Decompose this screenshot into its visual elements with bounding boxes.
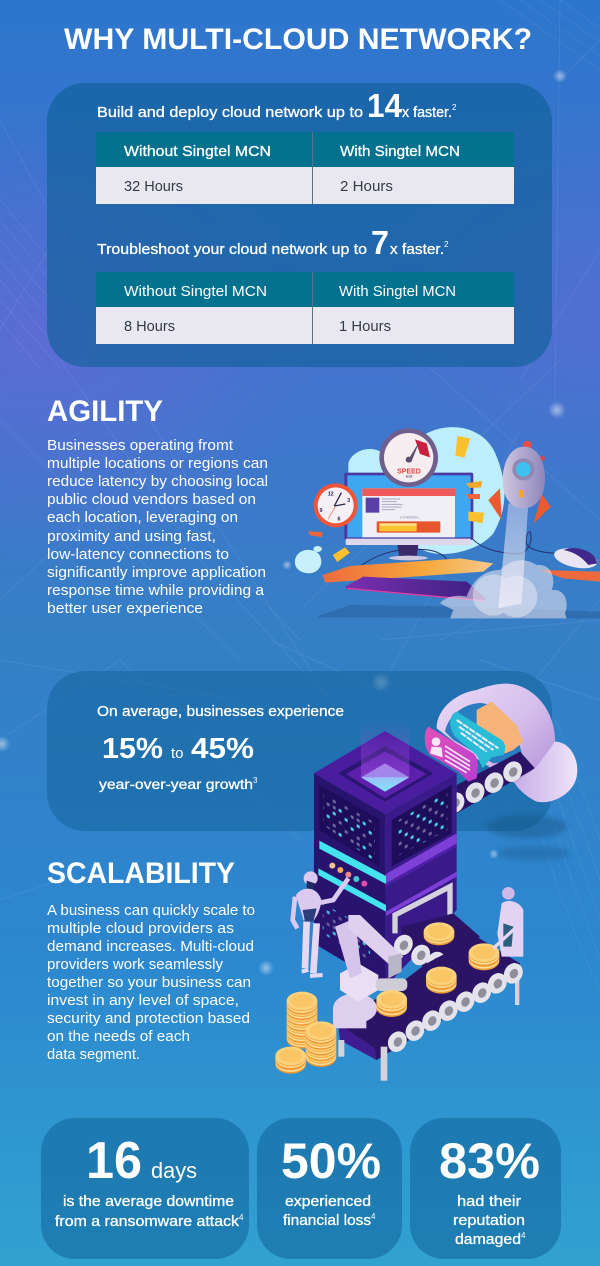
- table: build and deploy hours: [96, 132, 514, 204]
- heading: build and deploy: 14: [367, 87, 403, 124]
- icon: rocket: [488, 441, 551, 608]
- icon: right robot: [493, 887, 523, 957]
- icon: speed gauge: test: [406, 475, 413, 479]
- heading: build and deploy: [97, 87, 457, 124]
- icon: mouse: [552, 545, 599, 572]
- title: WHY MULTI-CLOUD NETWORK?: [64, 23, 532, 56]
- panel: financial loss statistic: experienced: [285, 1194, 371, 1210]
- heading: build and deploy: x faster.: [402, 104, 452, 121]
- icon: monitor: LOADING...: [400, 515, 422, 520]
- text block: scalability description: A business can quickly scale to: [47, 903, 255, 919]
- icon: left robot: [293, 871, 348, 976]
- icon: clock: 6: [338, 517, 341, 523]
- panel: downtime statistic: [41, 1118, 249, 1259]
- panel: growth statistic: 45%: [191, 733, 254, 765]
- table: build and deploy hours: With Singtel MCN: [340, 143, 460, 160]
- icon: robot arm: [333, 915, 407, 1028]
- icon: chat cards: [425, 712, 505, 782]
- heading: build and deploy: 2: [452, 103, 457, 112]
- text block: agility description: [47, 438, 268, 617]
- icon: back conveyor: [390, 913, 480, 976]
- table: troubleshoot hours: 8 Hours: [124, 318, 175, 335]
- icon: front conveyor: [338, 937, 526, 1081]
- panel: reputation statistic: damaged: [455, 1232, 521, 1248]
- panel: reputation statistic: 4: [521, 1231, 526, 1240]
- text block: scalability description: security and protection based: [47, 1011, 250, 1027]
- icon: clock: 9: [320, 508, 323, 514]
- text block: scalability description: on the needs of each: [47, 1029, 190, 1045]
- icon: conveyor top: [442, 752, 535, 816]
- panel: downtime statistic: from a ransomware attack: [55, 1214, 240, 1230]
- panel: growth statistic: 3: [253, 776, 258, 785]
- panel: financial loss statistic: [257, 1118, 402, 1259]
- panel: downtime statistic: is the average downtime: [63, 1194, 234, 1210]
- panel: growth statistic: to: [171, 745, 184, 762]
- icon: smoke cloud: [440, 560, 567, 618]
- panel: reputation statistic: had their: [457, 1194, 521, 1210]
- icon: belt coins: [376, 922, 499, 1017]
- text block: agility description: each location, leveraging on: [47, 510, 238, 526]
- text block: scalability description: together so your business can: [47, 975, 251, 991]
- heading: troubleshoot: Troubleshoot your cloud network up to: [97, 241, 367, 258]
- heading: troubleshoot: 2: [444, 240, 449, 249]
- text block: scalability description: data segment.: [47, 1047, 140, 1063]
- text block: agility description: multiple locations or regions can: [47, 456, 268, 472]
- icon: monitor: [344, 473, 473, 560]
- text block: scalability description: providers work seamlessly: [47, 957, 224, 973]
- table: build and deploy hours: 2 Hours: [340, 178, 393, 195]
- icon: cloud lobe: [515, 742, 577, 802]
- table: troubleshoot hours: [96, 272, 514, 344]
- heading: agility: AGILITY: [47, 395, 163, 428]
- table: build and deploy hours: 32 Hours: [124, 178, 183, 195]
- text block: agility description: better user experience: [47, 601, 203, 617]
- panel: growth statistic: year-over-year growth: [99, 776, 253, 792]
- text block: scalability description: demand increases. Multi-cloud: [47, 939, 254, 955]
- panel: financial loss statistic: financial loss: [283, 1213, 371, 1229]
- heading: scalability: SCALABILITY: [47, 857, 235, 890]
- heading: troubleshoot: 7: [371, 224, 389, 261]
- table: troubleshoot hours: Without Singtel MCN: [124, 283, 267, 300]
- panel: downtime statistic: days: [151, 1158, 197, 1183]
- text block: agility description: reduce latency by choosing local: [47, 474, 268, 490]
- panel: downtime statistic: 4: [239, 1213, 244, 1222]
- icon: cloud: [437, 684, 555, 802]
- text block: agility description: public cloud vendors based on: [47, 492, 256, 508]
- illustration: speed test monitor and rocket: [295, 427, 600, 618]
- panel: growth statistic: On average, businesses experience: [97, 703, 344, 720]
- icon: desk slab: [323, 558, 493, 583]
- icon: keyboard: [345, 577, 486, 601]
- panel: speed comparison: [47, 83, 552, 367]
- panel: growth statistic: [47, 671, 552, 831]
- panel: downtime statistic: 16: [86, 1132, 142, 1190]
- illustration: data server, cloud and coin conveyor: [275, 684, 577, 1081]
- icon: coin stacks: [275, 992, 336, 1074]
- icon: frame gate: [395, 887, 450, 933]
- icon: server stack: [314, 723, 457, 987]
- icon: speed gauge: [379, 428, 438, 487]
- icon: clock: [314, 483, 358, 527]
- table: troubleshoot hours: 1 Hours: [339, 318, 391, 335]
- icon: clock: 12: [328, 491, 334, 497]
- text block: agility description: low-latency connections to: [47, 547, 229, 563]
- text block: scalability description: [47, 903, 255, 1063]
- text block: agility description: response time while providing a: [47, 583, 265, 599]
- panel: financial loss statistic: 50%: [281, 1133, 381, 1189]
- text block: scalability description: invest in any level of space,: [47, 993, 239, 1009]
- heading: build and deploy: Build and deploy cloud network up to: [97, 104, 363, 121]
- panel: reputation statistic: 83%: [439, 1133, 540, 1189]
- icon: clock: 3: [347, 498, 350, 504]
- heading: troubleshoot: x faster.: [390, 241, 444, 258]
- icon: speed gauge: SPEED: [397, 469, 421, 476]
- text block: agility description: Businesses operating fromt: [47, 438, 233, 454]
- table: build and deploy hours: Without Singtel MCN: [124, 143, 271, 160]
- panel: reputation statistic: [410, 1118, 561, 1259]
- text block: agility description: significantly improve application: [47, 565, 266, 581]
- panel: financial loss statistic: 4: [371, 1212, 376, 1221]
- table: troubleshoot hours: With Singtel MCN: [339, 283, 456, 300]
- text block: scalability description: multiple cloud providers as: [47, 921, 234, 937]
- panel: reputation statistic: reputation: [453, 1213, 525, 1229]
- panel: growth statistic: 15%: [102, 733, 163, 765]
- heading: troubleshoot: [97, 224, 449, 261]
- text block: agility description: proximity and using fast,: [47, 529, 216, 545]
